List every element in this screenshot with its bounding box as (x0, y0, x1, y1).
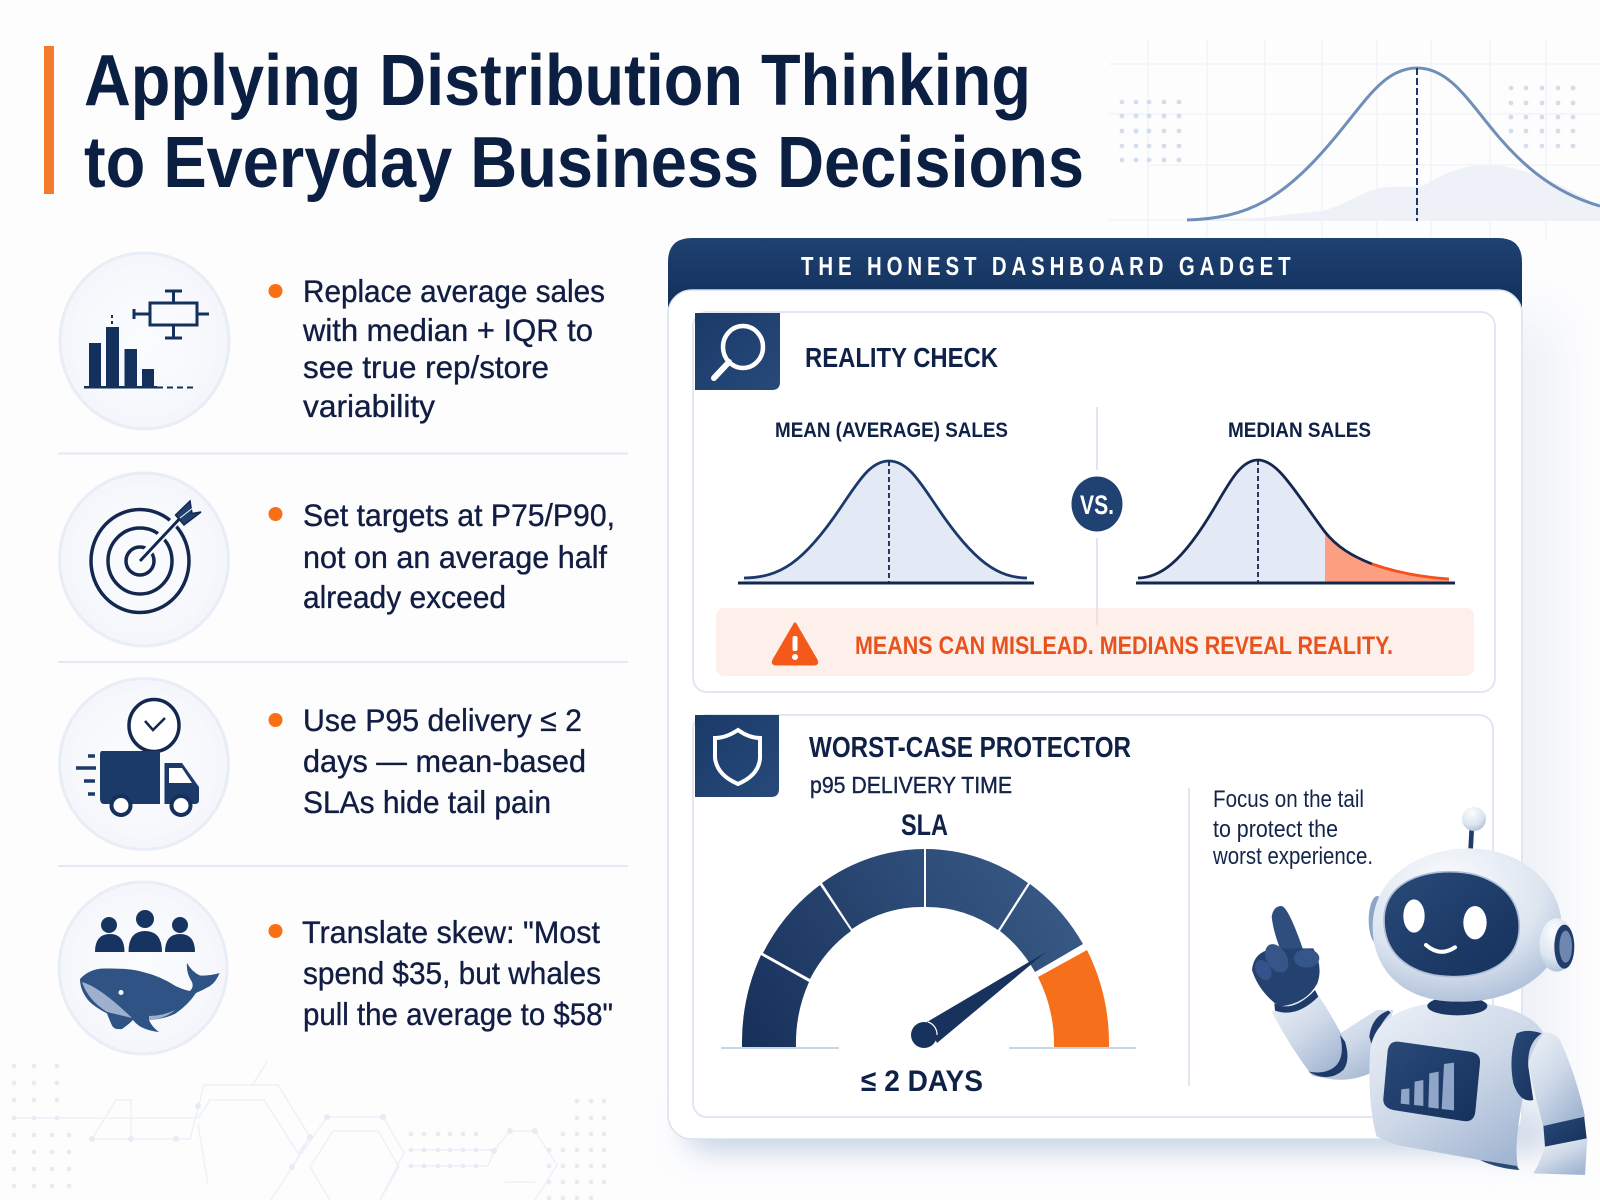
takeaway text 4: Translate skew: "Most (302, 914, 600, 950)
icon: people and whale (59, 882, 227, 1054)
heading: worst-case protector: p95 DELIVERY TIME (810, 772, 1012, 798)
panel: the honest dashboard gadget (668, 238, 1522, 1139)
callout text: Focus on the tail (1213, 786, 1364, 813)
panel body (668, 290, 1522, 1139)
bullet dot 2 (268, 507, 282, 521)
callout: warning (716, 608, 1474, 676)
icon: magnifier (695, 313, 780, 390)
takeaway text 3 (303, 702, 586, 820)
takeaway text 1: with median + IQR to (302, 312, 593, 348)
divider and vs badge: VS. (1080, 490, 1114, 520)
takeaway text 2: not on an average half (303, 539, 607, 575)
takeaway text 2: already exceed (303, 579, 506, 615)
icon: delivery truck with clock (60, 678, 228, 850)
takeaway text 4: spend $35, but whales (303, 955, 601, 991)
icon: shield (695, 715, 779, 797)
title: to Everyday Business Decisions (84, 123, 1084, 203)
decorative network bottom left (12, 1062, 606, 1200)
gauge needle (911, 952, 1046, 1048)
chart: median sales: MEDIAN SALES (1228, 419, 1371, 442)
divider and vs badge (1072, 407, 1122, 625)
takeaway text 4 (302, 914, 613, 1032)
chart: median sales (1136, 419, 1455, 583)
icon: histogram and box plot (60, 253, 229, 429)
icon: target with arrow (60, 473, 228, 646)
takeaway text 3: Use P95 delivery ≤ 2 (303, 702, 582, 738)
takeaway text 4: pull the average to $58" (303, 996, 613, 1032)
callout text (1212, 786, 1373, 870)
bullet dot 3 (268, 713, 282, 727)
heading: worst-case protector (809, 732, 1131, 798)
chart: mean sales: MEAN (AVERAGE) SALES (775, 419, 1008, 442)
takeaway text 2 (303, 497, 615, 615)
title accent bar (44, 46, 54, 194)
panel: worst-case protector (693, 715, 1493, 1117)
panel header: THE HONEST DASHBOARD GADGET (801, 252, 1291, 281)
heading: reality check: REALITY CHECK (805, 342, 998, 373)
callout text: to protect the (1213, 816, 1338, 843)
takeaway text 2: Set targets at P75/P90, (303, 497, 615, 533)
chart: sla gauge: ≤ 2 DAYS (861, 1065, 983, 1098)
chart: mean sales (738, 419, 1034, 583)
takeaway text 1 (302, 273, 605, 424)
takeaway text 3: SLAs hide tail pain (303, 784, 551, 820)
panel shadows (690, 320, 1550, 1148)
takeaway text 1: variability (303, 388, 435, 424)
chart: sla gauge: SLA (901, 809, 948, 842)
bullet dot 1 (268, 284, 282, 298)
callout: warning: MEANS CAN MISLEAD. MEDIANS REVEAL REALITY. (855, 632, 1393, 660)
background chart decoration (1109, 40, 1600, 240)
takeaway text 1: Replace average sales (303, 273, 605, 309)
bullet dot 4 (268, 924, 282, 938)
heading: worst-case protector: WORST-CASE PROTECTOR (809, 732, 1131, 764)
title: Applying Distribution Thinking (84, 41, 1031, 121)
icon: warning triangle (773, 624, 817, 664)
takeaway text 1: see true rep/store (303, 349, 549, 385)
takeaway text 3: days — mean-based (303, 743, 586, 779)
robot mascot (1252, 807, 1587, 1175)
callout text: worst experience. (1212, 843, 1373, 870)
chart: sla gauge (721, 809, 1136, 1098)
panel header (668, 238, 1522, 320)
left column: takeaways (58, 253, 628, 1054)
panel: reality check (693, 312, 1495, 692)
title (84, 41, 1084, 203)
